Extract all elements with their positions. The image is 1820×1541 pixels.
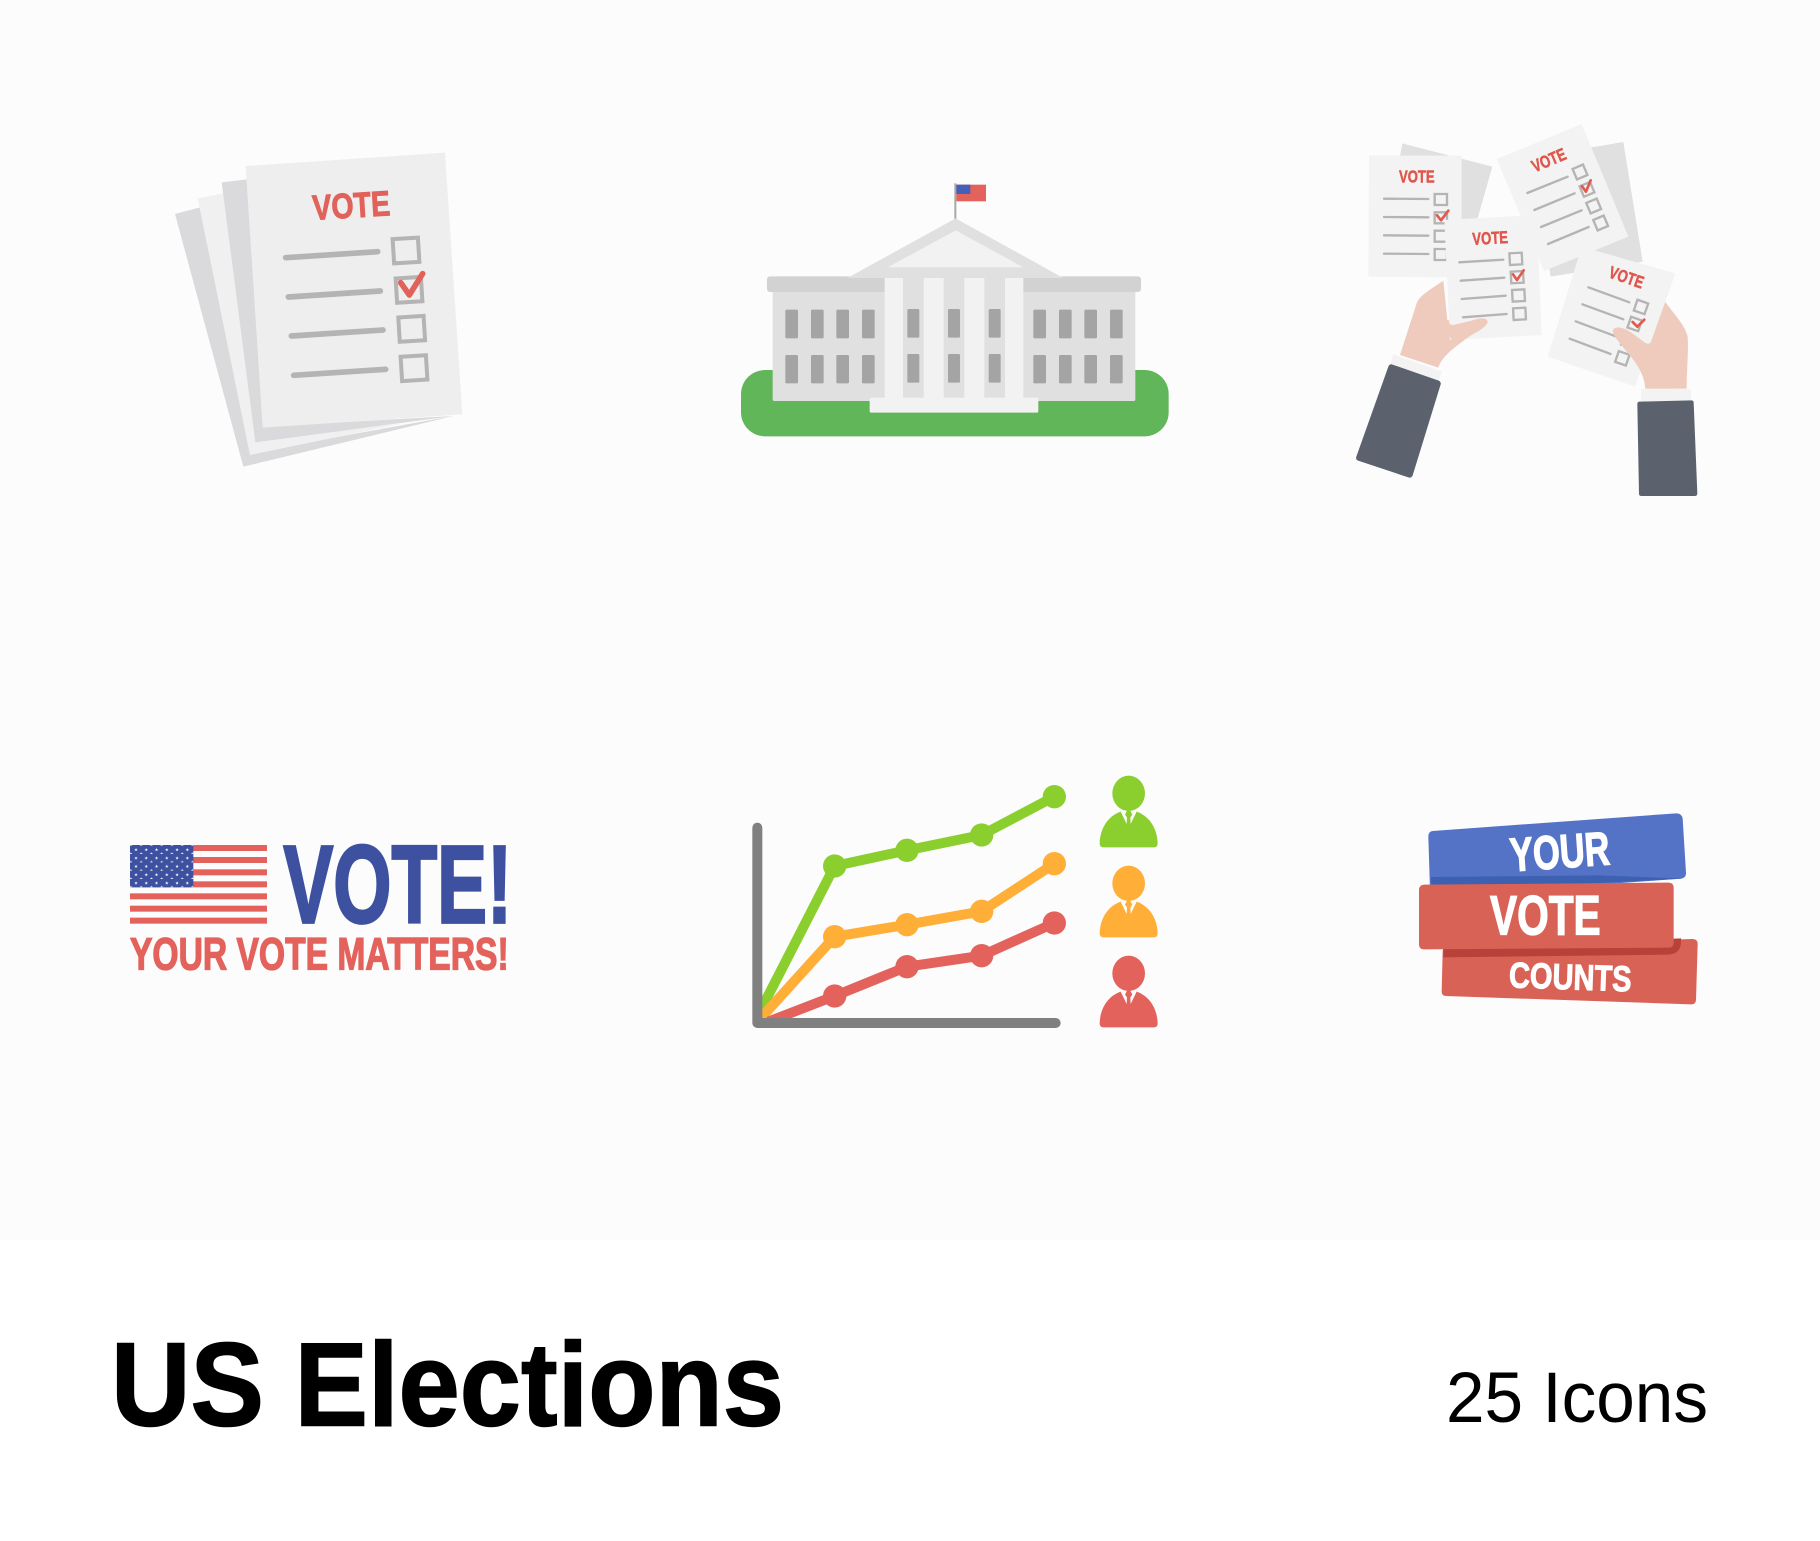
icon: your vote counts ribbons: COUNTS <box>1508 954 1632 999</box>
icon: your vote counts ribbons: YOUR <box>1508 823 1611 882</box>
icon: your vote counts ribbons: VOTE <box>1490 885 1601 947</box>
icon: vote banner with flag: VOTE! <box>283 823 512 946</box>
icon: your vote counts ribbons <box>1419 813 1698 1004</box>
icon: poll line chart with candidates <box>757 776 1158 1027</box>
title: US Elections <box>111 1318 784 1452</box>
icon: vote banner with flag <box>130 823 512 979</box>
icon: stacked vote ballots: VOTE <box>311 184 391 228</box>
icon: stacked vote ballots <box>175 153 462 467</box>
icon count: 25 Icons <box>1446 1359 1708 1438</box>
icon: hands holding ballots: VOTE <box>1472 227 1508 249</box>
icon: hands holding ballots <box>1356 124 1697 496</box>
icon: hands holding ballots: VOTE <box>1606 262 1647 293</box>
icon: hands holding ballots: VOTE <box>1529 144 1569 176</box>
icon: white house <box>741 183 1169 436</box>
icon: hands holding ballots: VOTE <box>1399 166 1435 186</box>
icon: vote banner with flag: YOUR VOTE MATTERS! <box>130 928 509 979</box>
